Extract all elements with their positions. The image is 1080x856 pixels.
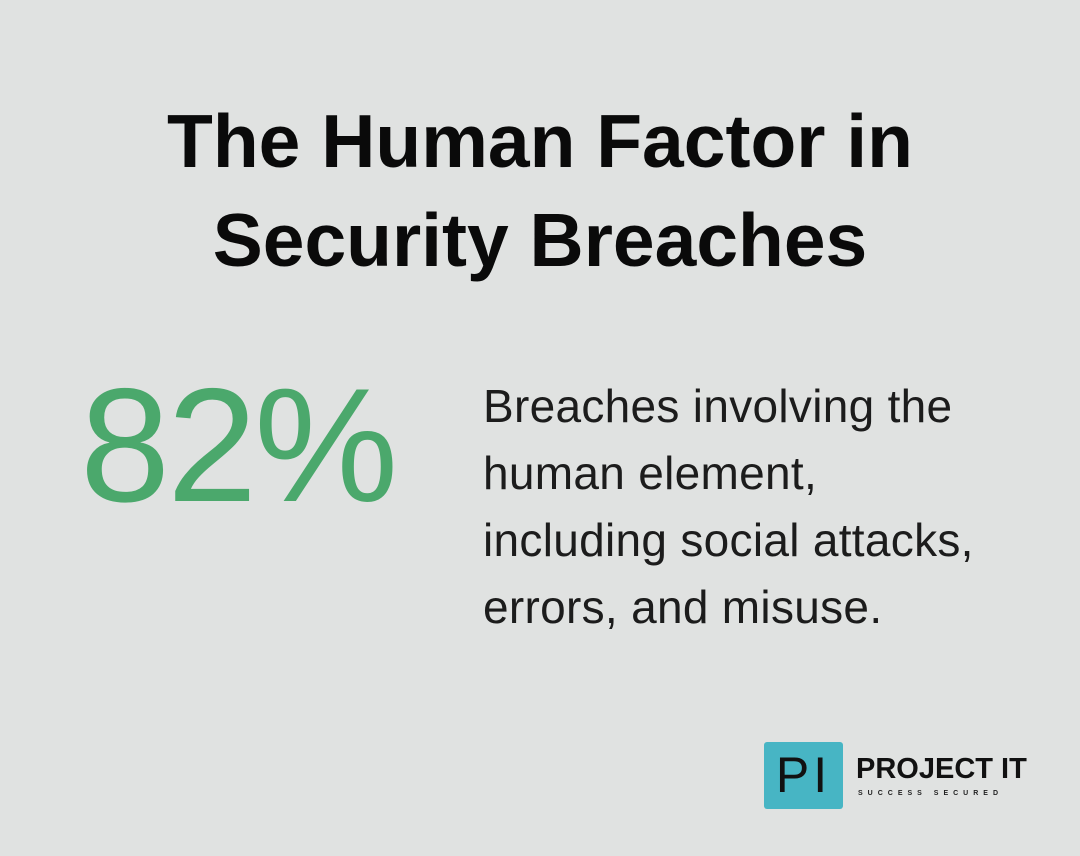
- description text: Breaches involving the: [483, 380, 952, 432]
- description text: including social attacks,: [483, 514, 974, 566]
- title: Security Breaches: [213, 198, 867, 282]
- title: [167, 99, 913, 282]
- icon: PI box: [764, 742, 843, 809]
- title: The Human Factor in: [167, 99, 913, 183]
- logo: Project IT: [764, 742, 1027, 809]
- logo tagline: SUCCESS SECURED: [858, 790, 1003, 797]
- icon: PI box: PI: [776, 747, 831, 803]
- description text: human element,: [483, 447, 817, 499]
- logo name: PROJECT IT: [856, 753, 1027, 785]
- description text: [483, 380, 974, 633]
- description text: errors, and misuse.: [483, 581, 882, 633]
- statistic: 82%: 82%: [80, 355, 395, 536]
